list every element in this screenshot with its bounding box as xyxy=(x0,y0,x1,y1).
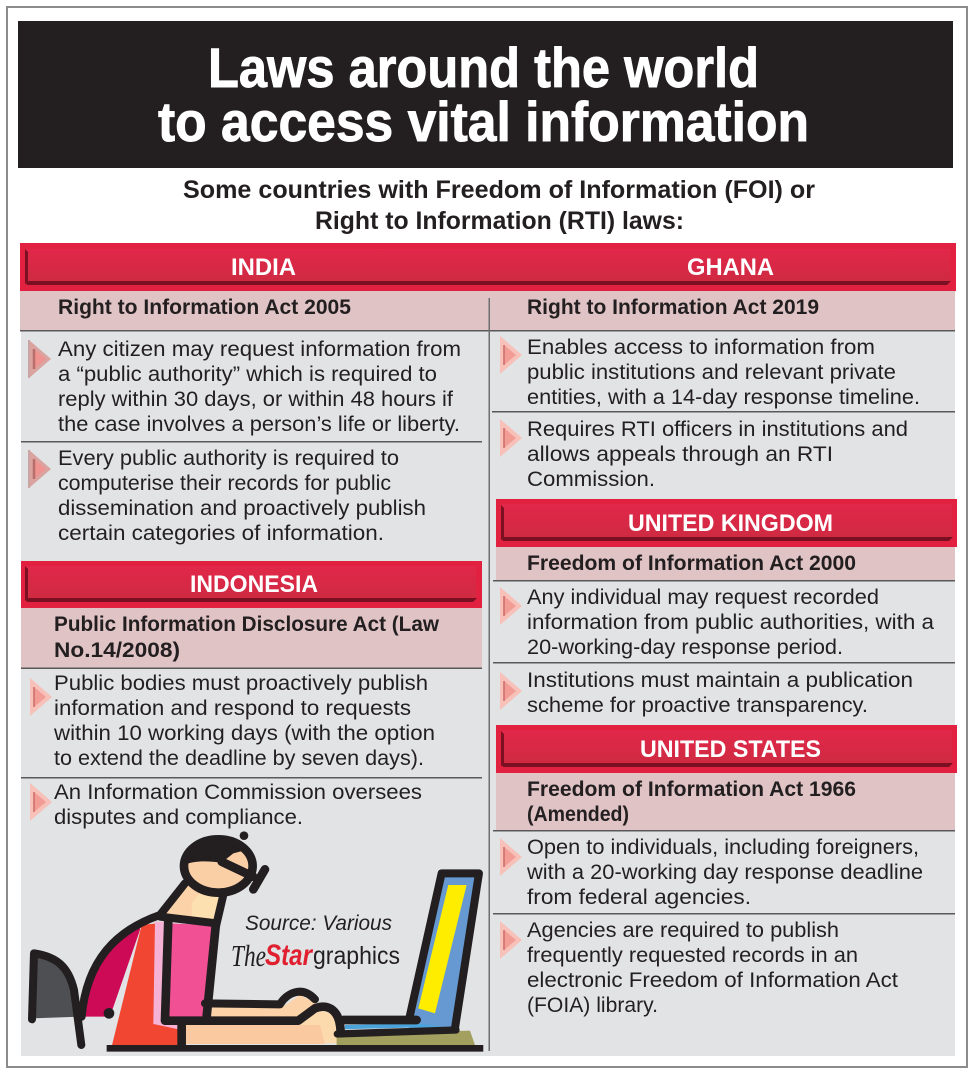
act band: India and Ghana: Right to Information Act 2005 xyxy=(58,296,351,319)
panel: India xyxy=(21,337,482,545)
text: Indonesia point 1: to extend the deadline by seven days). xyxy=(54,746,424,770)
text: Ghana point 2 xyxy=(527,417,908,491)
text: India point 2: Every public authority is required to xyxy=(58,446,399,470)
icon: bullet arrow xyxy=(500,838,522,876)
text: Indonesia point 1: Public bodies must proactively publish xyxy=(54,671,428,695)
text: Indonesia point 1: within 10 working days (with the option xyxy=(53,721,435,745)
text: Ghana point 2: Commission. xyxy=(527,467,655,491)
act band: India and Ghana xyxy=(20,291,955,332)
icon: bullet arrow xyxy=(30,783,52,821)
text: Indonesia point 1 xyxy=(53,671,435,770)
heading: United States xyxy=(496,725,957,773)
text: United States point 2: (FOIA) library. xyxy=(527,993,658,1017)
title banner: Laws around the world xyxy=(208,36,759,99)
text: Indonesia point 1: information and respond to requests xyxy=(54,696,411,720)
text: United Kingdom point 1 xyxy=(527,585,934,659)
panel: Ghana xyxy=(492,335,955,491)
text: India point 1: the case involves a person’s life or liberty. xyxy=(58,412,460,436)
act band: Indonesia: No.14/2008) xyxy=(54,639,180,662)
shirt back xyxy=(112,923,178,1047)
text: Ghana point 1: public institutions and relevant private xyxy=(527,360,896,384)
logo: The Star graphics: graphics xyxy=(313,942,400,970)
title banner: to access vital information xyxy=(158,90,809,153)
heading: United States: UNITED STATES xyxy=(640,736,821,763)
panel: United States xyxy=(493,725,957,1017)
text: United Kingdom point 2: Institutions must maintain a publication xyxy=(527,668,913,692)
text: United Kingdom point 2 xyxy=(527,668,913,717)
text: United States point 1: from federal agencies. xyxy=(527,885,751,909)
cape xyxy=(83,927,140,1017)
desk xyxy=(337,1031,475,1045)
logo: The Star graphics xyxy=(231,938,400,973)
icon: bullet arrow xyxy=(29,450,51,488)
panel: India and Ghana header: INDIA xyxy=(231,254,296,281)
text: United Kingdom point 2: scheme for proactive transparency. xyxy=(527,693,868,717)
heading: Indonesia xyxy=(21,561,482,608)
act band: Indonesia: Public Information Disclosure Act (Law xyxy=(54,613,440,636)
panel: India and Ghana header: GHANA xyxy=(687,254,774,281)
text: United States point 2: Agencies are required to publish xyxy=(527,918,839,942)
far arm xyxy=(207,995,320,1017)
back and neck outline xyxy=(82,883,185,1017)
text: Indonesia point 2: disputes and compliance. xyxy=(54,805,303,829)
text: Ghana point 2: allows appeals through an RTI xyxy=(527,442,833,466)
text: Ghana point 1: Enables access to information from xyxy=(527,335,875,359)
text: India point 2: computerise their records for public xyxy=(58,471,391,495)
text: United Kingdom point 1: Any individual may request recorded xyxy=(527,585,879,609)
text: Ghana point 1 xyxy=(527,335,920,409)
subtitle xyxy=(183,176,815,235)
text: United States point 2 xyxy=(527,918,898,1017)
chair xyxy=(32,953,81,1018)
icon: bullet arrow xyxy=(500,921,522,959)
text: Indonesia point 2: An Information Commission oversees xyxy=(54,780,422,804)
text: India point 2: certain categories of information. xyxy=(58,521,384,545)
act band: United States xyxy=(493,773,955,832)
panel: Indonesia xyxy=(21,561,482,829)
icon: bullet arrow xyxy=(500,336,522,374)
heading: United Kingdom xyxy=(496,499,957,547)
head xyxy=(185,840,252,893)
act band: United States: Freedom of Information Act 1966 xyxy=(527,778,856,801)
text: United Kingdom point 1: information from public authorities, with a xyxy=(527,610,934,634)
logo: The Star graphics: The xyxy=(231,938,266,973)
laptop base xyxy=(345,1023,443,1029)
icon: bullet arrow xyxy=(500,587,522,625)
text: India point 1 xyxy=(58,337,461,436)
text: India point 2 xyxy=(58,446,426,545)
text: India point 2: dissemination and proactively publish xyxy=(58,496,426,520)
text: United States point 2: frequently requested records in an xyxy=(527,943,858,967)
icon: bullet arrow xyxy=(30,678,52,716)
neck xyxy=(163,883,223,922)
text: United States point 1: Open to individuals, including foreigners, xyxy=(527,835,919,859)
illustration: person at laptop xyxy=(32,831,480,1048)
near arm and leg xyxy=(185,1010,338,1043)
title banner xyxy=(18,21,953,168)
text: Indonesia point 2 xyxy=(54,780,422,829)
text: India point 1: reply within 30 days, or within 48 hours if xyxy=(58,387,453,411)
text: Ghana point 1: entities, with a 14-day response timeline. xyxy=(527,385,920,409)
text: India point 1: a “public authority” which is required to xyxy=(58,362,437,386)
act band: Indonesia xyxy=(21,608,482,669)
subtitle: Some countries with Freedom of Information (FOI) or xyxy=(183,176,815,204)
act band: United Kingdom: Freedom of Information Act 2000 xyxy=(527,552,856,575)
icon: bullet arrow xyxy=(29,340,51,378)
hair xyxy=(184,836,248,865)
subtitle: Right to Information (RTI) laws: xyxy=(315,207,684,235)
column divider xyxy=(488,298,490,1051)
heading: Indonesia: INDONESIA xyxy=(190,571,318,598)
text: United Kingdom point 1: 20-working-day response period. xyxy=(527,635,843,659)
text: United States point 1: with a 20-working day response deadline xyxy=(526,860,923,884)
act band: United States: (Amended) xyxy=(527,803,629,826)
text: India point 1: Any citizen may request information from xyxy=(58,337,461,361)
source text: Source: Various xyxy=(245,912,392,935)
text: Ghana point 2: Requires RTI officers in institutions and xyxy=(527,417,908,441)
panel: United Kingdom xyxy=(493,499,957,717)
act band: India and Ghana: Right to Information Act 2019 xyxy=(527,296,819,319)
torso outline xyxy=(165,920,341,1032)
icon: bullet arrow xyxy=(500,419,522,457)
heading: United Kingdom: UNITED KINGDOM xyxy=(628,510,833,537)
act band: United Kingdom xyxy=(493,547,955,582)
text: United States point 2: electronic Freedom of Information Act xyxy=(527,968,898,992)
glasses xyxy=(222,862,265,889)
panel: India and Ghana header xyxy=(20,243,956,291)
icon: bullet arrow xyxy=(500,672,522,710)
content background panel xyxy=(21,291,955,1056)
laptop screen xyxy=(408,873,479,1030)
shirt front xyxy=(168,923,215,1017)
text: United States point 1 xyxy=(526,835,923,909)
logo: The Star graphics: Star xyxy=(265,939,314,972)
